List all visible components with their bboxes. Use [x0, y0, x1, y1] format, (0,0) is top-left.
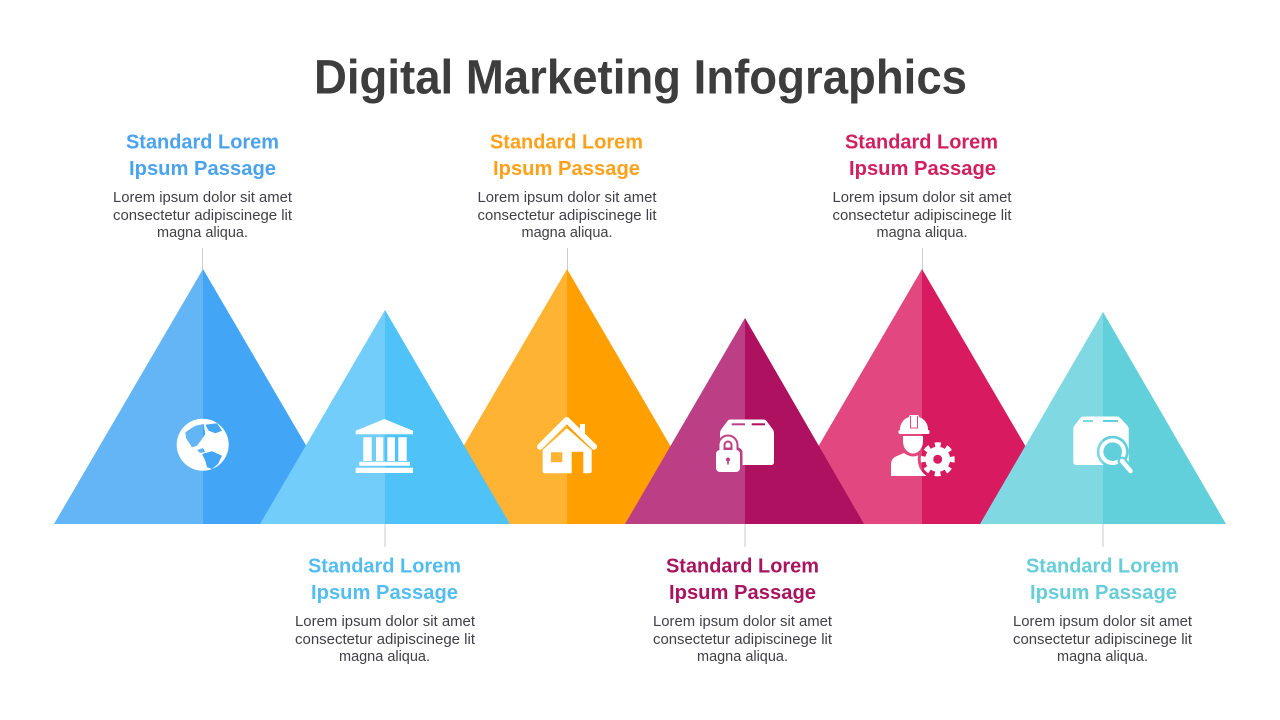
text block: item 1: Ipsum Passage: [129, 158, 276, 180]
text block: item 5: [832, 132, 1012, 241]
triangle: pink: [773, 269, 1071, 524]
text block: item 3: Standard Lorem: [490, 132, 643, 154]
text block: item 6: [1013, 556, 1193, 665]
title: Digital Marketing Infographics: [314, 52, 967, 104]
text block: item 2: Standard Lorem: [308, 556, 461, 578]
icon: box with magnifier: [1073, 416, 1133, 474]
text block: item 6: Standard Lorem: [1026, 556, 1179, 578]
text block: item 4: magna aliqua.: [697, 648, 788, 665]
triangle: blue: [54, 269, 352, 524]
icon: worker with gear: [891, 415, 955, 476]
text block: item 6: Lorem ipsum dolor sit amet: [1013, 613, 1193, 630]
text block: item 2: Lorem ipsum dolor sit amet: [295, 613, 476, 630]
text block: item 6: magna aliqua.: [1057, 648, 1148, 665]
text block: item 3: magna aliqua.: [522, 224, 612, 241]
text block: item 3: consectetur adipiscinege lit: [478, 207, 657, 224]
text block: item 4: Ipsum Passage: [669, 582, 816, 604]
text block: item 1: consectetur adipiscinege lit: [113, 207, 293, 224]
text block: item 6: consectetur adipiscinege lit: [1013, 631, 1193, 648]
text block: item 5: Lorem ipsum dolor sit amet: [832, 189, 1012, 206]
icon: locked box: [716, 420, 774, 472]
triangle: teal: [980, 312, 1226, 524]
connector: item 6: [1102, 524, 1104, 547]
text block: item 3: Lorem ipsum dolor sit amet: [478, 189, 657, 206]
connector: item 4: [744, 524, 746, 547]
connector: item 3: [566, 248, 568, 270]
connector: item 2: [384, 524, 386, 547]
text block: item 4: Standard Lorem: [666, 556, 819, 578]
text block: item 1: magna aliqua.: [157, 224, 248, 241]
connector: item 1: [202, 248, 204, 270]
connector: item 5: [922, 248, 924, 270]
text block: item 2: Ipsum Passage: [311, 582, 458, 604]
triangle: magenta: [625, 318, 864, 524]
text block: item 2: [295, 556, 476, 665]
text block: item 4: consectetur adipiscinege lit: [653, 631, 833, 648]
text block: item 2: consectetur adipiscinege lit: [295, 631, 476, 648]
text block: item 5: Ipsum Passage: [849, 158, 996, 180]
text block: item 2: magna aliqua.: [339, 648, 430, 665]
text block: item 4: [653, 556, 833, 665]
triangle: orange: [418, 269, 716, 524]
icon: globe: [176, 418, 229, 471]
icon: bank building: [356, 419, 413, 473]
triangle: sky blue: [260, 310, 510, 524]
icon: house: [540, 420, 594, 473]
text block: item 5: magna aliqua.: [876, 224, 968, 241]
text block: item 6: Ipsum Passage: [1030, 582, 1177, 604]
text block: item 4: Lorem ipsum dolor sit amet: [653, 613, 833, 630]
text block: item 1: [113, 132, 293, 241]
text block: item 3: [478, 132, 657, 241]
text block: item 3: Ipsum Passage: [493, 158, 640, 180]
text block: item 5: Standard Lorem: [845, 132, 998, 154]
text block: item 5: consectetur adipiscinege lit: [832, 207, 1012, 224]
text block: item 1: Lorem ipsum dolor sit amet: [113, 189, 293, 206]
text block: item 1: Standard Lorem: [126, 132, 279, 154]
